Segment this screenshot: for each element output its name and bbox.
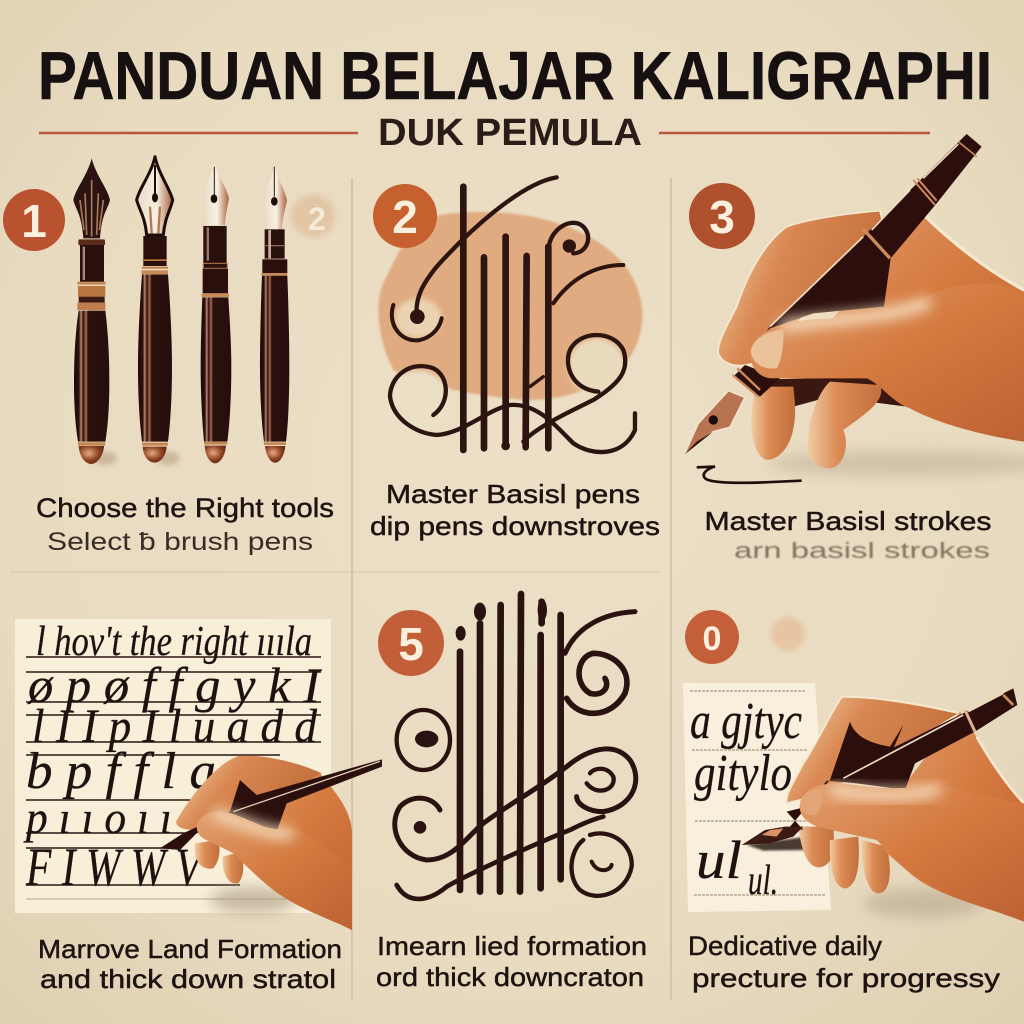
index finger <box>786 697 960 803</box>
hand with pen <box>160 756 382 930</box>
caption 6 <box>688 931 1000 993</box>
number badge 6 <box>685 610 739 664</box>
panel 4: practice sheet <box>15 619 382 994</box>
caption 5: ord thick downcraton <box>376 962 644 992</box>
handwriting <box>23 619 322 897</box>
flourish figure <box>395 594 636 899</box>
number badge 2: 2 <box>392 191 418 243</box>
pen 2 <box>137 157 180 465</box>
handwriting: l hov't the right ıııla <box>36 619 312 665</box>
caption 1: Choose the Right tools <box>36 493 334 523</box>
hand and pen illustration <box>684 134 1024 483</box>
number badge 5: 5 <box>398 618 424 670</box>
caption 6: Dedicative daily <box>688 931 883 961</box>
thumb highlight <box>830 788 940 795</box>
number badge 1 <box>3 189 65 251</box>
caption 2: Master Basisl pens <box>386 479 640 509</box>
handwriting: p ı ı o ı ı <box>23 792 172 843</box>
pen <box>684 134 982 455</box>
handwriting: F I W W V <box>25 837 206 897</box>
fingers <box>798 827 890 893</box>
pens group <box>73 157 289 465</box>
number badge 2 faint: 2 <box>308 201 326 237</box>
caption 6: precture for progressy <box>692 963 1000 993</box>
pen <box>742 688 1017 845</box>
number badge 1: 1 <box>21 195 47 247</box>
caption 2 <box>370 479 660 541</box>
pen 4 <box>260 163 289 463</box>
caption 5: Imearn lied formation <box>377 931 647 961</box>
thumb <box>197 812 352 930</box>
handwriting: ø p ø f f g y k I <box>27 657 322 713</box>
peach blob <box>378 212 642 400</box>
number badge 5 <box>378 610 444 676</box>
thumb <box>800 782 1024 922</box>
caption 2: dip pens downstroves <box>370 511 660 541</box>
pen <box>160 759 382 850</box>
hand back <box>780 215 1024 442</box>
handwriting: b p f f l a <box>26 743 216 800</box>
panel 1: tools <box>3 157 335 556</box>
thumb <box>750 284 1024 442</box>
handwriting: ul. <box>748 858 778 904</box>
table shadow <box>863 888 983 918</box>
panel 5: flourishes <box>376 594 647 992</box>
caption 4 <box>38 934 342 994</box>
caption 3 <box>704 506 992 563</box>
hand top halo <box>925 216 1024 290</box>
guide lines <box>26 657 321 899</box>
table shadow <box>767 450 1024 477</box>
thumb highlight <box>213 813 293 834</box>
panel 6: daily practice <box>683 610 1024 993</box>
number badge 3 <box>689 183 755 249</box>
hand and pen <box>742 688 1024 922</box>
handwriting: gitylo <box>694 745 792 802</box>
handwriting: ul <box>696 830 742 890</box>
number badge 6: 0 <box>703 620 721 658</box>
caption 4: Marrove Land Formation <box>38 934 342 964</box>
handwriting: a gjtyc <box>690 693 802 750</box>
index finger <box>718 211 887 366</box>
pen 1 <box>73 158 117 465</box>
lower fingers <box>743 377 907 468</box>
index finger <box>176 756 322 830</box>
panel 3: hand with pen <box>684 134 1024 563</box>
fingers <box>195 840 297 913</box>
paper <box>15 619 331 913</box>
hand top halo <box>977 737 1024 803</box>
faint dot <box>771 617 805 651</box>
caption 3: arn basisl strokes <box>734 538 990 563</box>
panel 2: basic strokes <box>370 177 660 541</box>
number badge 3: 3 <box>709 191 735 243</box>
hand back <box>213 773 352 930</box>
strokes <box>390 177 635 452</box>
pen 3 <box>201 162 231 463</box>
thumb highlight <box>780 302 930 327</box>
caption 1: Select ƀ brush pens <box>47 528 313 556</box>
calligraphy figure with peach blob <box>378 177 642 452</box>
hand back <box>883 712 1024 922</box>
handwriting: l I I p I l u a d d <box>32 700 318 753</box>
thumbnail <box>751 330 783 369</box>
caption 4: and thick down stratol <box>40 964 336 994</box>
number badge 2 <box>373 184 437 248</box>
stroke end dots <box>410 239 576 450</box>
caption 5 <box>376 931 647 992</box>
caption 1 <box>36 493 334 556</box>
number badge 2 faint <box>291 194 335 238</box>
paper <box>683 683 831 912</box>
ink stroke <box>697 467 802 483</box>
subtitle with rules: DUK PEMULA <box>378 112 642 154</box>
handwriting <box>690 693 802 904</box>
caption 3: Master Basisl strokes <box>704 506 992 536</box>
nib shadow <box>747 837 807 851</box>
thumbnail <box>800 789 823 815</box>
guide lines <box>690 691 825 895</box>
